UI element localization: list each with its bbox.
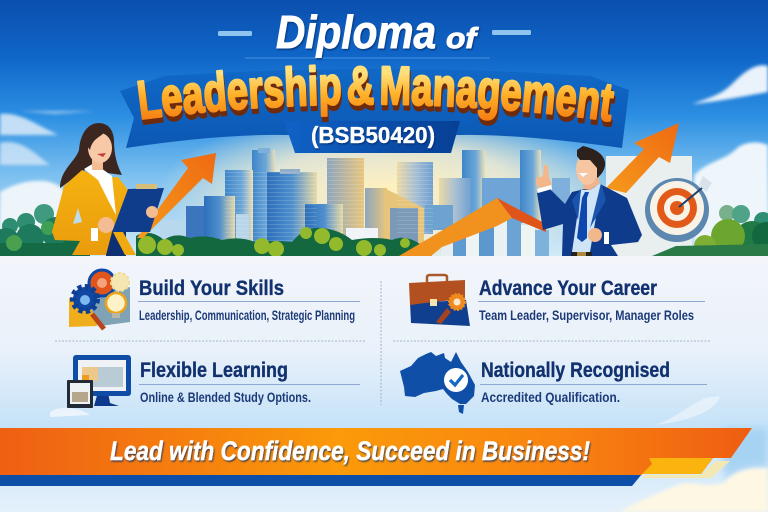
heading: Advance Your Career — [479, 277, 657, 300]
rule — [478, 301, 705, 302]
raised hand — [536, 165, 552, 190]
rule — [139, 384, 360, 385]
lapels — [572, 183, 606, 228]
icon: briefcase — [409, 275, 470, 326]
divider lines — [55, 281, 711, 405]
cuff — [537, 185, 552, 193]
smile — [579, 173, 588, 177]
course code: (BSB50420) — [311, 122, 435, 148]
banner body — [0, 428, 752, 475]
neck — [92, 158, 103, 170]
title accents — [218, 30, 531, 58]
heading: Nationally Recognised — [481, 359, 670, 382]
icon: gears and bulb — [69, 270, 130, 329]
item: Flexible Learning — [67, 355, 360, 408]
hair — [577, 146, 605, 178]
building behind target — [606, 156, 692, 256]
item: Advance Your Career — [409, 275, 705, 326]
smile — [97, 153, 106, 157]
bottom clouds — [50, 396, 768, 512]
icon: Australia map with check — [400, 352, 475, 414]
jacket — [52, 170, 128, 255]
item: Build Your Skills — [69, 270, 360, 329]
jacket — [537, 185, 642, 256]
rule — [138, 301, 360, 302]
title: Leadership & Management: Leadership & Management — [142, 69, 616, 127]
tree band — [136, 228, 432, 256]
ribbon fold — [642, 461, 730, 478]
slogan text: Lead with Confidence, Succeed in Business! — [110, 436, 590, 466]
tie — [577, 192, 589, 242]
clipboard — [112, 188, 164, 232]
subtitle plate — [284, 121, 460, 153]
clouds right — [692, 65, 768, 240]
belt — [571, 252, 592, 256]
hands — [98, 217, 114, 233]
body text: Online & Blended Study Options. — [140, 389, 311, 405]
right buildings — [384, 150, 570, 250]
fringe — [87, 128, 113, 150]
clouds left — [0, 111, 95, 240]
trees — [0, 204, 768, 257]
face — [576, 153, 598, 185]
arm gap — [73, 208, 82, 224]
target icon — [645, 176, 712, 242]
woman — [52, 123, 164, 256]
title: Leadership & Management: Leadership & Management — [137, 64, 614, 122]
sun glow — [160, 110, 620, 270]
title: Diploma of: of — [446, 23, 480, 55]
neck — [583, 176, 600, 190]
sky background — [0, 0, 768, 258]
body text: Team Leader, Supervisor, Manager Roles — [479, 307, 694, 323]
rule — [480, 384, 707, 385]
right arrow — [399, 123, 679, 256]
title ribbon — [120, 69, 629, 148]
face — [88, 133, 112, 163]
man — [536, 146, 642, 256]
lower hand — [588, 228, 602, 242]
shirt — [84, 163, 116, 215]
left arrow — [137, 153, 216, 238]
slogan banner — [0, 428, 752, 486]
item: Nationally Recognised — [400, 352, 707, 414]
lower bars — [441, 218, 549, 256]
left buildings — [160, 148, 387, 250]
skirt — [106, 230, 126, 256]
banner shadow band — [0, 474, 642, 486]
title: Diploma of: Diploma — [276, 6, 436, 58]
bottom strip — [0, 428, 768, 512]
sleeve cuff — [91, 228, 98, 241]
body text: Accredited Qualification. — [481, 389, 620, 405]
heading: Flexible Learning — [140, 359, 288, 382]
shirt — [572, 183, 601, 252]
info panel — [0, 256, 768, 428]
hair — [60, 123, 122, 188]
body text: Leadership, Communication, Strategic Planning — [139, 307, 355, 323]
heading: Build Your Skills — [139, 277, 284, 300]
city skyline — [160, 148, 692, 256]
icon: monitor and tablet — [67, 355, 131, 408]
